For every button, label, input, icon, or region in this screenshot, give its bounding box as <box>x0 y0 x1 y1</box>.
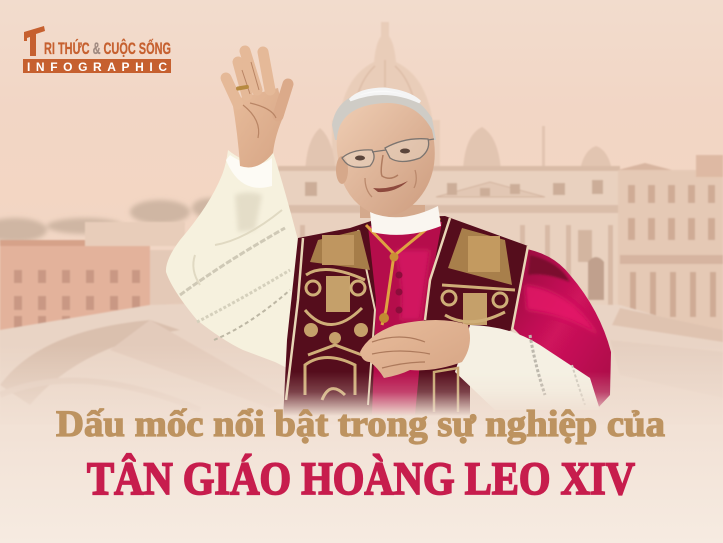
dome of the basilica <box>332 22 440 180</box>
stole embroidery right <box>425 218 528 330</box>
background: Rome and St Peter's Basilica <box>0 22 723 425</box>
building behind sleeve <box>150 250 280 310</box>
right sleeve white <box>455 325 600 410</box>
logo T mark <box>24 26 45 56</box>
colonnade arc <box>0 320 180 405</box>
left red building <box>0 222 185 335</box>
stole embroidery left <box>286 230 375 405</box>
logo banner text: INFOGRAPHIC <box>27 60 167 74</box>
heading line 2: TÂN GIÁO HOÀNG LEO XIV <box>87 453 635 505</box>
logo banner <box>23 59 171 73</box>
side domes <box>305 126 612 175</box>
eyeglasses <box>342 139 434 167</box>
ground fade <box>0 345 723 434</box>
logo <box>23 26 171 74</box>
basilica facade <box>278 168 620 308</box>
inner cassock <box>368 222 442 415</box>
lower tracery <box>434 368 458 412</box>
neck and collar <box>360 205 425 218</box>
ear <box>336 156 348 184</box>
pope figure <box>166 51 611 420</box>
logo wordmark: RI THỨC & CUỘC SỐNG <box>44 38 171 58</box>
piazza ground <box>0 300 723 425</box>
raised arm sleeve <box>166 150 298 372</box>
head <box>332 89 436 216</box>
gold cord <box>366 218 440 325</box>
nose and smile <box>381 155 398 178</box>
eyes <box>355 148 410 160</box>
right side buildings <box>618 155 723 335</box>
hand on chest <box>360 320 470 378</box>
tree line <box>0 198 228 242</box>
raised hand <box>226 51 288 167</box>
cape: crimson right shoulder <box>514 249 611 407</box>
chasuble base <box>283 216 528 420</box>
heading line 1: Dấu mốc nổi bật trong sự nghiệp của <box>56 404 665 445</box>
